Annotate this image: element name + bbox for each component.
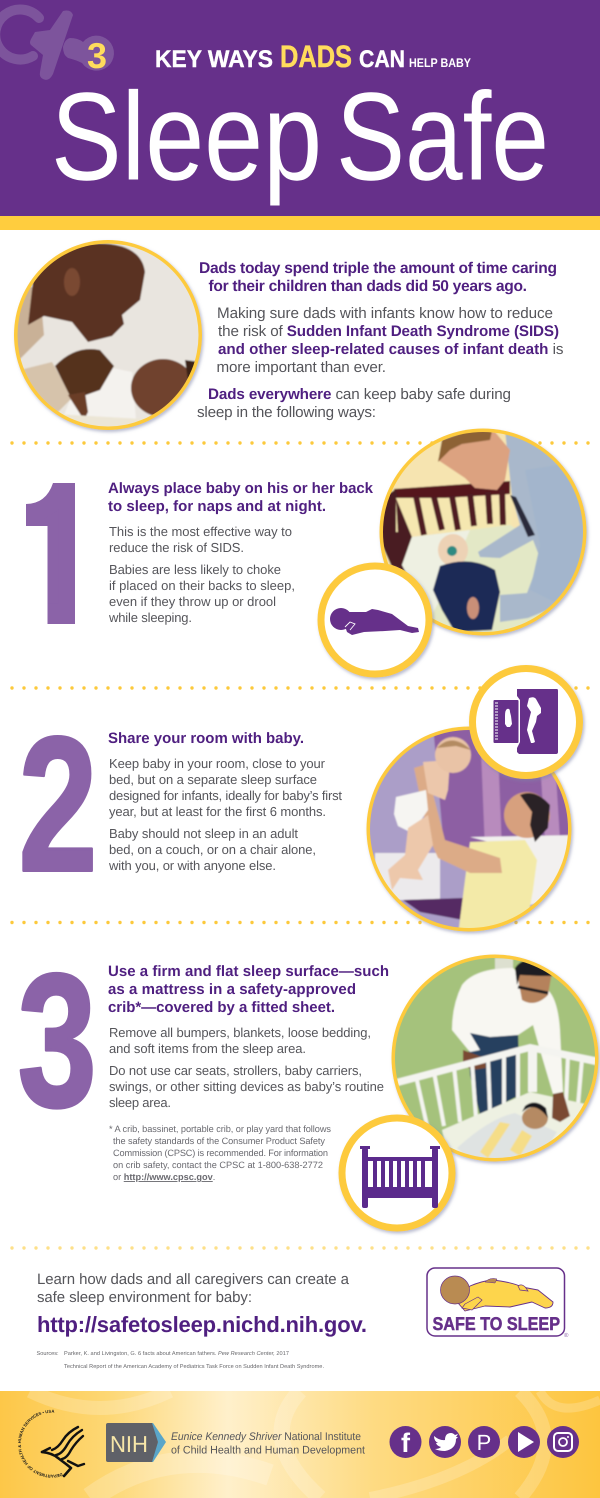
footer band [0, 1391, 600, 1498]
icon: pacifier [0, 10, 114, 80]
heading line [155, 39, 472, 74]
icon: instagram [547, 1426, 579, 1458]
section 1 [26, 482, 373, 625]
logo: HHS seal [18, 1410, 86, 1478]
NIH institute name: of Child Health and Human Development [171, 1444, 365, 1456]
dotted dividers [12, 443, 596, 1248]
call to action [37, 1271, 367, 1337]
heading line: HELP BABY [409, 56, 472, 70]
section 2 body: with you, or with anyone else. [108, 858, 276, 873]
intro text: and other sleep-related causes of infant death is [218, 341, 564, 358]
intro text: the risk of Sudden Infant Death Syndrome (SIDS) [218, 323, 559, 340]
logo: Safe to Sleep [427, 1268, 569, 1339]
section 1 body [108, 524, 295, 625]
section 1 body: even if they throw up or drool [109, 594, 276, 609]
NIH institute name: Eunice Kennedy Shriver National Institute [171, 1431, 361, 1443]
section 3 [18, 935, 389, 1182]
photo: father checking baby in crib [390, 950, 600, 1165]
logo: Safe to Sleep: SAFE TO SLEEP [432, 1313, 560, 1334]
numeral 2: 2 [18, 696, 98, 912]
section 1 body: while sleeping. [108, 610, 192, 625]
intro text: sleep in the following ways: [197, 404, 376, 421]
section 3 heading: crib*—covered by a fitted sheet. [108, 999, 335, 1016]
footnote: Commission (CPSC) is recommended. For information [113, 1148, 328, 1158]
footnote: on crib safety, contact the CPSC at 1-800-638-2772 [113, 1160, 323, 1170]
sources: Technical Report of the American Academy of Pediatrics Task Force on Sudden Infant Death Syndrome. [64, 1363, 324, 1370]
section 3 heading [108, 963, 389, 1016]
section 2 body: bed, on a couch, or on a chair alone, [109, 842, 316, 857]
footnote: the safety standards of the Consumer Product Safety [113, 1136, 325, 1146]
section 2 heading: Share your room with baby. [108, 730, 304, 747]
numeral 3: 3 [18, 935, 97, 1147]
section 2 body: Baby should not sleep in an adult [109, 826, 298, 841]
photo: father placing baby on back in crib [375, 425, 595, 640]
section 2 [18, 696, 342, 912]
section 2 body [108, 756, 342, 873]
title: Safe [336, 68, 549, 206]
call to action: http://safetosleep.nichd.nih.gov. [37, 1312, 367, 1337]
section 3 body: Remove all bumpers, blankets, loose bedding, [109, 1025, 371, 1040]
section 1 body: if placed on their backs to sleep, [109, 578, 295, 593]
title [51, 68, 549, 206]
heading line: DADS [280, 39, 352, 74]
intro text: more important than ever. [216, 359, 386, 376]
section 3 body: sleep area. [109, 1095, 171, 1110]
NIH institute name [171, 1431, 365, 1456]
photo: father smiling at infant [14, 240, 206, 434]
section 1 heading: Always place baby on his or her back [108, 480, 374, 497]
icon: twitter [429, 1426, 461, 1458]
icon: crib [342, 1118, 452, 1228]
section 1 body: reduce the risk of SIDS. [109, 540, 244, 555]
section 3 body: and soft items from the sleep area. [109, 1041, 306, 1056]
call to action: Learn how dads and all caregivers can create a [37, 1271, 350, 1288]
icon: sleeping baby on back [321, 566, 429, 674]
intro text: Dads today spend triple the amount of time caring [199, 260, 557, 277]
heading line: CAN [359, 46, 405, 73]
section 3 body: swings, or other sitting devices as baby’s routine [109, 1079, 384, 1094]
logo: NIH [106, 1423, 166, 1462]
logo: Safe to Sleep: ® [564, 1332, 569, 1339]
section 3 body: Do not use car seats, strollers, baby carriers, [109, 1063, 362, 1078]
heading line: KEY WAYS [155, 46, 273, 73]
logo: NIH: NIH [110, 1431, 148, 1457]
section 2 body: bed, but on a separate sleep surface [109, 772, 317, 787]
photo: father lifting baby [365, 725, 575, 935]
intro text [197, 260, 564, 421]
icon: pinterest [468, 1426, 500, 1458]
icon: crib beside adult bed [472, 668, 580, 776]
sources: Sources: [36, 1351, 59, 1357]
header banner [0, 0, 600, 230]
intro text: Dads everywhere can keep baby safe during [208, 386, 511, 403]
numeral 1: 1 [12, 444, 123, 667]
icon: play [508, 1426, 540, 1458]
icon: facebook [390, 1426, 422, 1458]
section 1 heading [108, 480, 374, 515]
numeral 1 [26, 483, 75, 624]
section 2 body: designed for infants, ideally for baby’s first [109, 788, 342, 803]
sources: Parker, K. and Livingston, G. 6 facts about American fathers. Pew Research Center, 2017 [64, 1350, 289, 1357]
number 3: 3 [87, 35, 107, 76]
footnote: or http://www.cpsc.gov. [113, 1172, 215, 1182]
section 3 heading: Use a firm and flat sleep surface—such [108, 963, 389, 980]
footnote [109, 1124, 331, 1182]
intro text: for their children than dads did 50 years ago. [208, 278, 527, 295]
icon: pinterest: P [477, 1430, 491, 1455]
section 2 body: Keep baby in your room, close to your [109, 756, 326, 771]
section 1 body: Babies are less likely to choke [109, 562, 281, 577]
section 2 body: year, but at least for the first 6 months. [109, 804, 326, 819]
intro text: Making sure dads with infants know how to reduce [217, 305, 553, 322]
section 3 heading: as a mattress in a safety-approved [108, 981, 356, 998]
section 1 body: This is the most effective way to [109, 524, 292, 539]
section 3 body [109, 1025, 384, 1110]
icon: facebook: f [401, 1428, 411, 1458]
logo: HHS seal: DEPARTMENT OF HEALTH & HUMAN SERVICES • USA [18, 1410, 63, 1478]
call to action: safe sleep environment for baby: [37, 1289, 252, 1306]
sources [36, 1350, 324, 1370]
footnote: * A crib, bassinet, portable crib, or play yard that follows [109, 1124, 331, 1134]
section 1 heading: to sleep, for naps and at night. [108, 498, 326, 515]
title: Sleep [51, 68, 322, 206]
